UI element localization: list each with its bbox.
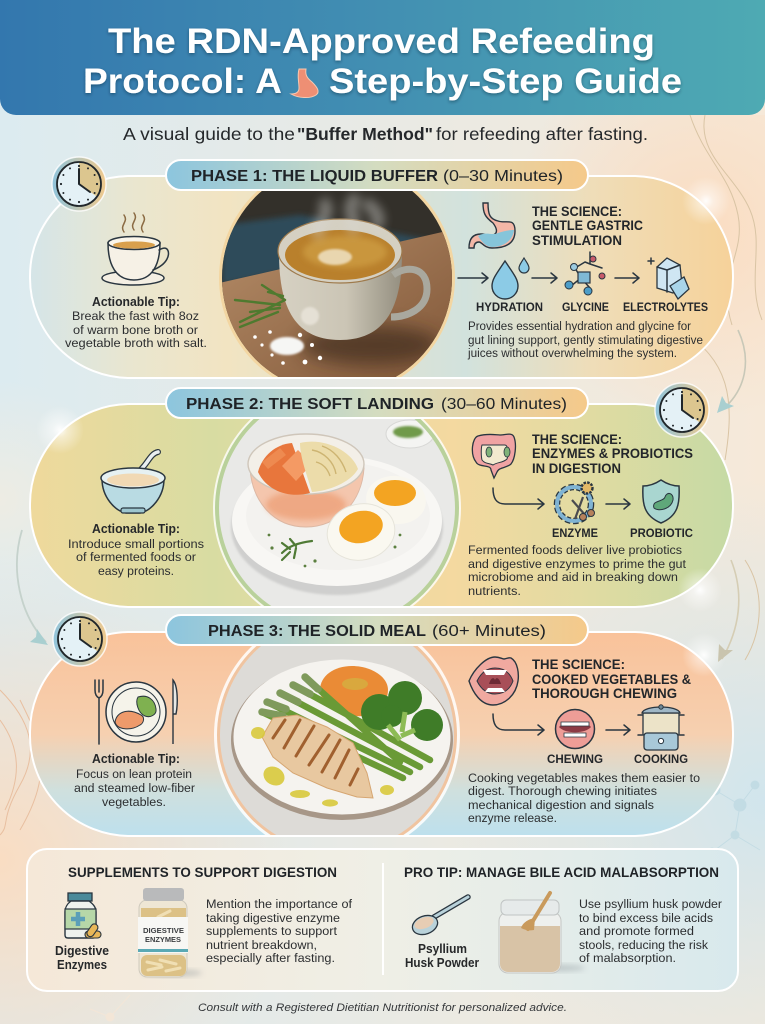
text: science heading 1: THE SCIENCE: [532,203,622,219]
photo: digestive enzymes jar: DIGESTIVE [143,926,184,935]
photo: psyllium jar [499,893,585,973]
arrow: to probiotic [606,499,630,509]
icon: tea cup [102,213,168,285]
icon: plate with fork and knife [95,680,177,744]
photo: digestive enzymes jar: ENZYMES [145,935,181,944]
title: The RDN-Approved Refeeding [108,22,655,61]
title [83,22,682,101]
text: science heading 3 [532,656,691,701]
photo: grilled chicken plate [214,646,460,835]
labels: chewing cooking [547,752,688,766]
text: science body 3: Cooking vegetables makes them easier to [468,771,700,785]
text: science body 2 [468,543,687,598]
text: actionable tip 3: and steamed low-fiber [74,781,195,795]
arrow: to chewing [493,714,544,735]
icon: psyllium spoon [410,897,468,938]
label: psyllium husk powder [405,942,479,970]
text: actionable tip 1: of warm bone broth or [73,323,198,337]
arrow: to enzyme [493,488,544,509]
text: supplements body: taking digestive enzyme [206,911,340,925]
text: science body 1: Provides essential hydration and glycine for [468,319,691,333]
arrow: phase 2 to phase 3 [17,530,48,645]
icon: enzyme gear and scissors [557,482,594,521]
title: Step-by-Step Guide [329,62,682,101]
text: science heading 1 [532,203,643,248]
arrow: phase 1 to phase 2 [717,330,745,413]
labels: chewing cooking: CHEWING [547,752,603,766]
heading pill: phase 2 [166,388,588,418]
text: actionable tip 3: vegetables. [102,795,166,809]
text: actionable tip 2 [68,521,204,578]
text: supplements body: Mention the importance of [206,897,353,911]
heading pill: phase 1 [166,160,588,190]
text: science body 1: gut lining support, gently stimulating digestive [468,333,703,347]
labels: hydration glycine electrolytes [476,300,708,314]
arrow: to glycine [532,273,557,283]
labels: hydration glycine electrolytes: GLYCINE [562,300,609,314]
text: actionable tip 3: Focus on lean protein [76,767,192,781]
subtitle: for refeeding after fasting. [436,124,648,144]
text: pro tip body: Use psyllium husk powder [579,897,722,911]
text: pro tip body: of malabsorption. [579,951,676,965]
subtitle: "Buffer Method" [297,124,433,144]
subtitle: A visual guide to the [123,124,295,144]
panel: supplements and pro tip [27,849,738,991]
heading pill: phase 1: PHASE 1: THE LIQUID BUFFER [191,168,438,185]
text: science body 3 [468,771,700,825]
text: actionable tip 2: easy proteins. [98,564,174,578]
text: science body 1 [467,319,703,360]
labels: enzyme probiotic: ENZYME [552,526,598,540]
text: science body 3: enzyme release. [468,811,557,825]
text: science body 2: microbiome and aid in breaking down [468,570,678,584]
heading: pro tip: PRO TIP: MANAGE BILE ACID MALABSORPTION [404,864,719,880]
labels: enzyme probiotic: PROBIOTIC [630,526,693,540]
labels: chewing cooking: COOKING [634,752,688,766]
text: science body 3: mechanical digestion and signals [468,798,654,812]
label: psyllium husk powder: Husk Powder [405,956,479,970]
text: supplements body: especially after fasting. [206,951,335,965]
icon: intestine [472,434,515,478]
panel: phase 2 [29,403,734,608]
text: actionable tip 2: Actionable Tip: [92,521,180,536]
heading pill: phase 1: (0–30 Minutes) [443,168,563,185]
text: pro tip body [579,897,722,965]
icon: glycine molecule [565,252,605,295]
panel: phase 3 [29,631,734,837]
text: science body 2: and digestive enzymes to prime the gut [468,557,687,571]
text: science body 2: nutrients. [468,584,521,598]
text: science heading 2: IN DIGESTION [532,460,621,476]
label: psyllium husk powder: Psyllium [418,942,467,956]
arrow: to electrolytes [615,273,639,283]
text: pro tip body: stools, reducing the risk [579,938,709,952]
photo: digestive enzymes jar [138,888,202,977]
heading pill: phase 3 [166,615,588,645]
header banner [0,0,765,115]
text: actionable tip 3: Actionable Tip: [92,751,180,766]
text: pro tip body: and promote formed [579,924,694,938]
text: actionable tip 2: of fermented foods or [76,550,196,564]
panel: phase 1 [29,175,734,379]
icon: probiotic shield [643,480,679,523]
text: actionable tip 3 [74,751,195,809]
arrow: phase 2 to phase 3 right [718,560,739,662]
heading pill: phase 2: (30–60 Minutes) [441,396,567,413]
icon: chewing teeth [556,710,594,748]
text: science heading 3: COOKED VEGETABLES & [532,671,691,687]
icon: clock phase 2 [655,383,709,437]
heading pill: phase 2: PHASE 2: THE SOFT LANDING [186,396,434,413]
icon: pill bottle [65,893,101,938]
footer disclaimer: Consult with a Registered Dietitian Nutritionist for personalized advice. [198,1002,567,1014]
icon: stomach in title [291,69,318,98]
text: pro tip body: to bind excess bile acids [579,911,713,925]
icon: clock phase 1 [52,157,106,211]
heading pill: phase 3: (60+ Minutes) [432,623,546,640]
text: supplements body: nutrient breakdown, [206,938,317,952]
label: digestive enzymes: Enzymes [57,958,107,972]
arrow: to hydration [458,273,488,283]
text: science heading 1: GENTLE GASTRIC [532,217,643,233]
heading pill: phase 3: PHASE 3: THE SOLID MEAL [208,623,426,640]
labels: hydration glycine electrolytes: ELECTROLYTES [623,300,708,314]
text: science body 3: digest. Thorough chewing initiates [468,784,657,798]
label: digestive enzymes: Digestive [55,944,109,958]
photo: kimchi and soft eggs [213,419,461,606]
text: actionable tip 1: vegetable broth with salt. [65,336,207,350]
heading: supplements: SUPPLEMENTS TO SUPPORT DIGESTION [68,864,337,880]
icon: bowl and spoon [101,452,165,513]
text: science heading 1: STIMULATION [532,232,622,248]
text: science heading 2: THE SCIENCE: [532,431,622,447]
text: supplements body [206,897,353,965]
text: supplements body: supplements to support [206,924,338,938]
icon: electrolyte crystal [648,258,689,299]
text: actionable tip 1 [65,294,207,350]
text: science body 2: Fermented foods deliver live probiotics [468,543,682,557]
labels: hydration glycine electrolytes: HYDRATION [476,300,543,314]
title: Protocol: A [83,62,282,101]
icon: open mouth [469,657,518,705]
subtitle [123,124,648,144]
icon: clock phase 3 [53,612,107,666]
photo: bone broth mug [219,191,455,377]
icon: steamer pot [638,705,684,750]
text: actionable tip 2: Introduce small portions [68,537,204,551]
icon: water drop [492,258,529,299]
text: science body 1: juices without overwhelming the system. [467,346,677,360]
icon: stomach [469,203,515,248]
text: science heading 3: THE SCIENCE: [532,656,625,672]
arrow: to cooking [606,725,630,735]
text: science heading 2 [532,431,693,476]
text: actionable tip 1: Actionable Tip: [92,294,180,309]
label: digestive enzymes [55,944,109,972]
text: actionable tip 1: Break the fast with 8oz [72,309,199,323]
text: science heading 2: ENZYMES & PROBIOTICS [532,445,693,461]
labels: enzyme probiotic [552,526,693,540]
text: science heading 3: THOROUGH CHEWING [532,685,677,701]
